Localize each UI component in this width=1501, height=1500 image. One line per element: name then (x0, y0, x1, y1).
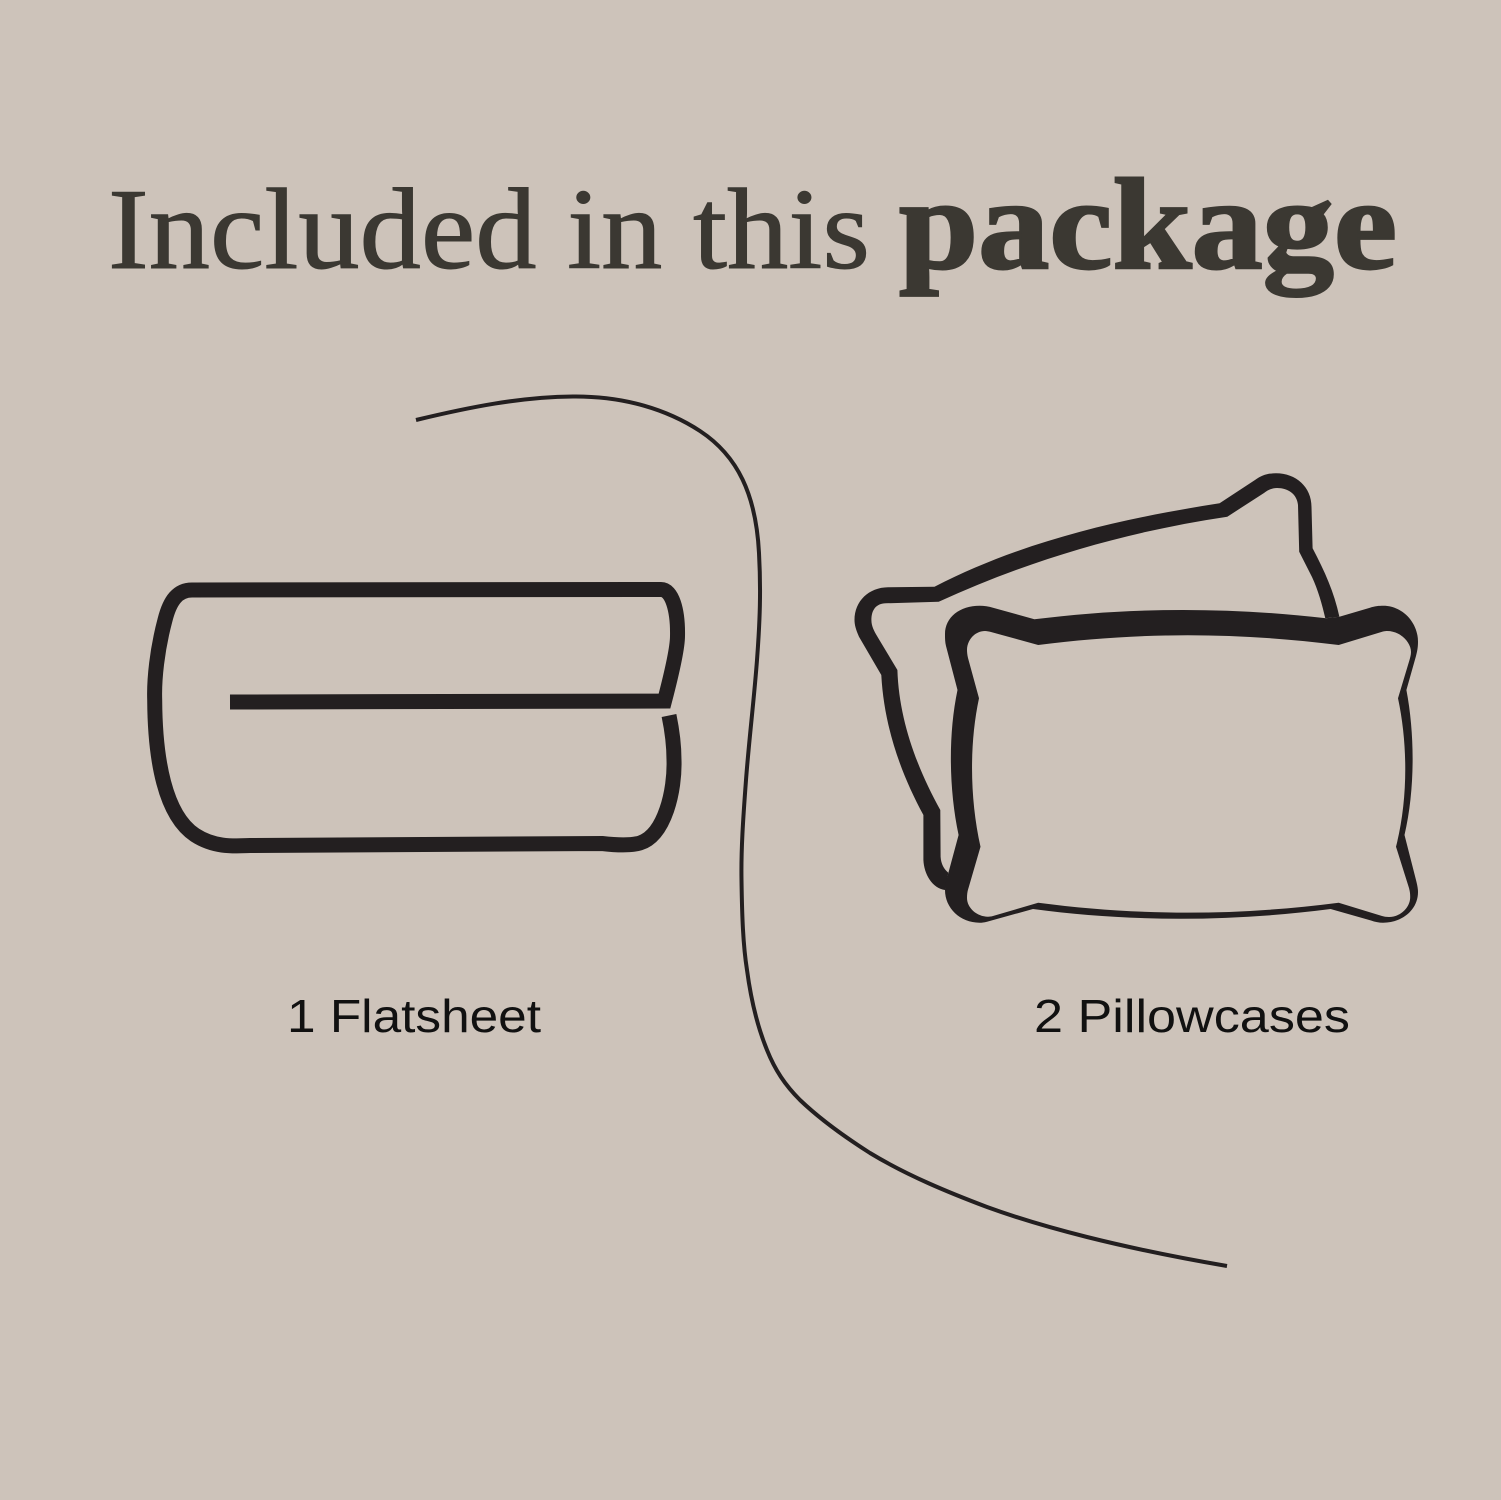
title (108, 153, 1397, 297)
title: regular part: Included in this (108, 166, 870, 293)
back pillow (854, 473, 1339, 890)
label: pillowcases: 2 Pillowcases (1034, 990, 1350, 1042)
icon: two pillowcases (854, 473, 1418, 923)
front pillow (945, 606, 1418, 923)
icon: folded flat sheet (155, 590, 678, 846)
title: bold part: package (899, 153, 1397, 297)
label: flat sheet: 1 Flatsheet (287, 990, 541, 1042)
divider curve (416, 396, 1227, 1266)
